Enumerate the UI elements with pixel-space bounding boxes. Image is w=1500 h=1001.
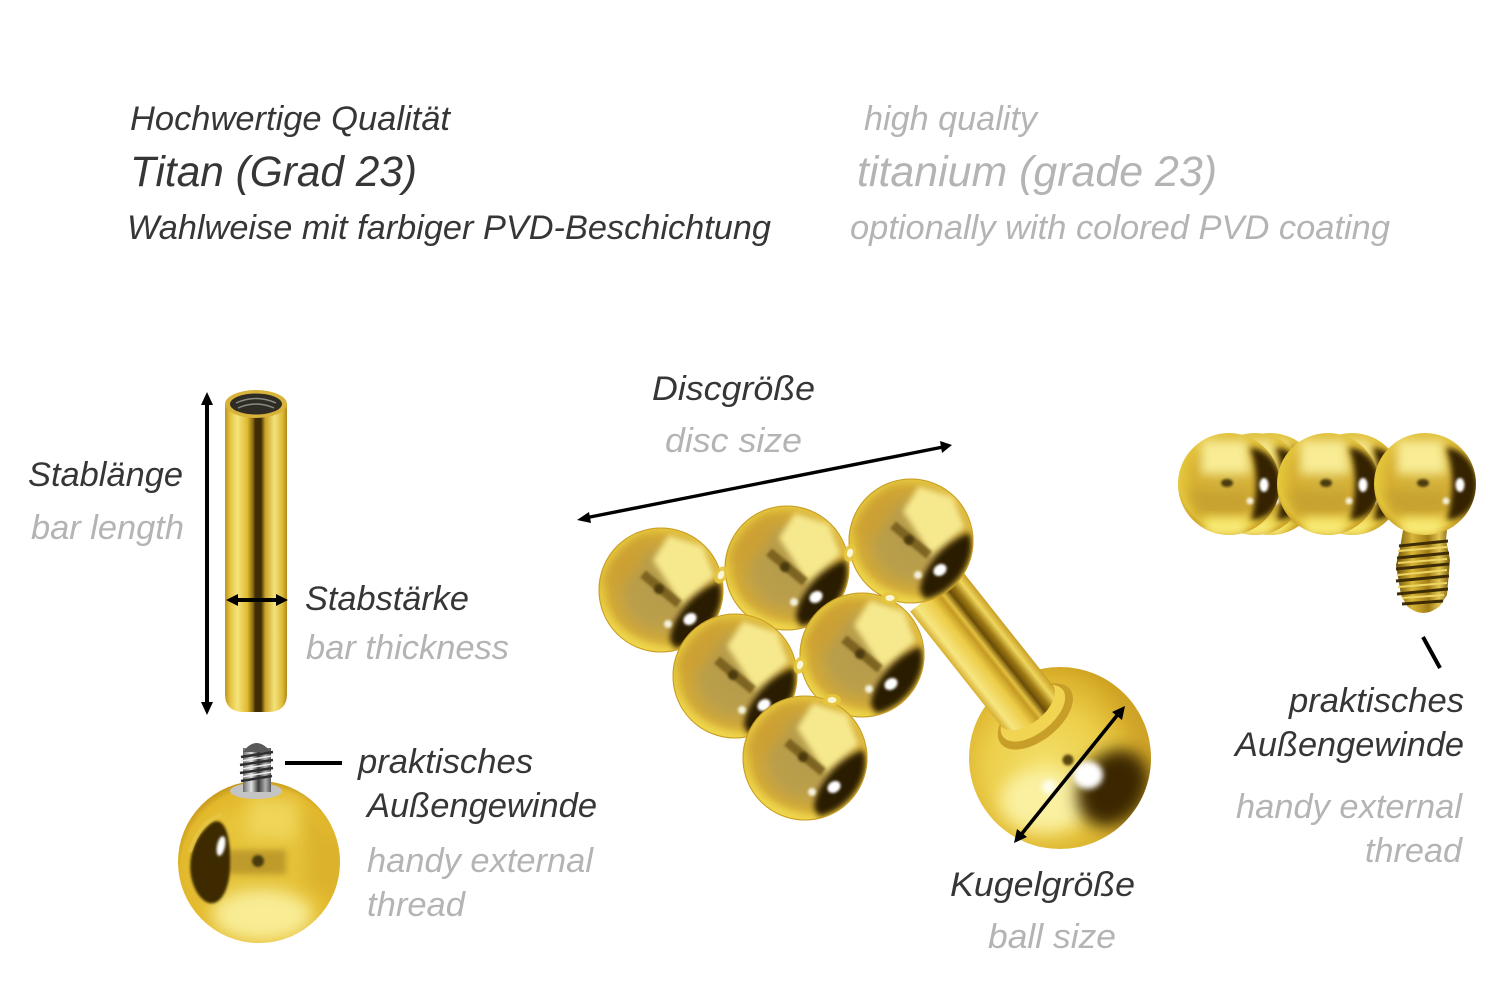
ball 4 [665,614,798,746]
ball 2 [717,506,850,638]
heading line: material: Titan (Grad 23) [130,148,417,196]
label: right thread German [1233,682,1464,764]
label: left thread English: thread [367,886,466,924]
arrow: bar length [201,392,213,715]
icon: six-ball disc cluster [591,478,974,828]
label: Kugelgröße: Kugelgröße [950,866,1135,904]
ball 5 [792,592,924,725]
heading line: optional coating: optionally with colored PVD coating [850,209,1390,247]
heading line: high quality: high quality [864,100,1039,138]
label: right thread English: handy external [1236,788,1463,826]
ball 3 [841,478,974,611]
icon: barbell shaft [902,564,1085,763]
label: right thread English [1236,788,1463,870]
heading line: titanium: titanium (grade 23) [857,148,1217,196]
icon: gold threaded tube [225,390,287,712]
label: Stablänge: Stablänge [28,456,183,494]
connectors [712,543,899,706]
ball 6 [735,696,868,828]
label: bar thickness: bar thickness [306,629,509,667]
label: disc size: disc size [665,422,802,460]
heading line: coating: Wahlweise mit farbiger PVD-Beschichtung [127,209,771,247]
label: Discgröße: Discgröße [652,370,815,408]
line: pointer to right thread [1423,637,1440,668]
ball 1 [591,528,724,660]
label: left thread German: praktisches [357,743,533,781]
label: right thread German: Außengewinde [1233,726,1464,764]
label: right thread German: praktisches [1288,682,1464,720]
label: ball size: ball size [988,918,1116,956]
icon: side view with thread [1178,433,1478,613]
arrow: disc size [577,441,952,523]
thread [1396,530,1450,613]
label: right thread English: thread [1365,832,1463,870]
line: pointer to left thread [285,761,342,765]
label: Stabstärke: Stabstärke [305,580,469,618]
arrow: ball size [1014,706,1125,843]
heading block: English [850,100,1390,247]
heading line: quality: Hochwertige Qualität [130,100,452,138]
icon: ball with silver thread [178,743,345,943]
label: left thread German [357,743,597,825]
icon: large ball of barbell [969,667,1164,849]
label: left thread English [367,842,594,924]
arrow: bar thickness [226,594,288,606]
label: left thread German: Außengewinde [365,787,597,825]
heading block: German [127,100,771,247]
label: left thread English: handy external [367,842,594,880]
label: bar length: bar length [31,509,184,547]
